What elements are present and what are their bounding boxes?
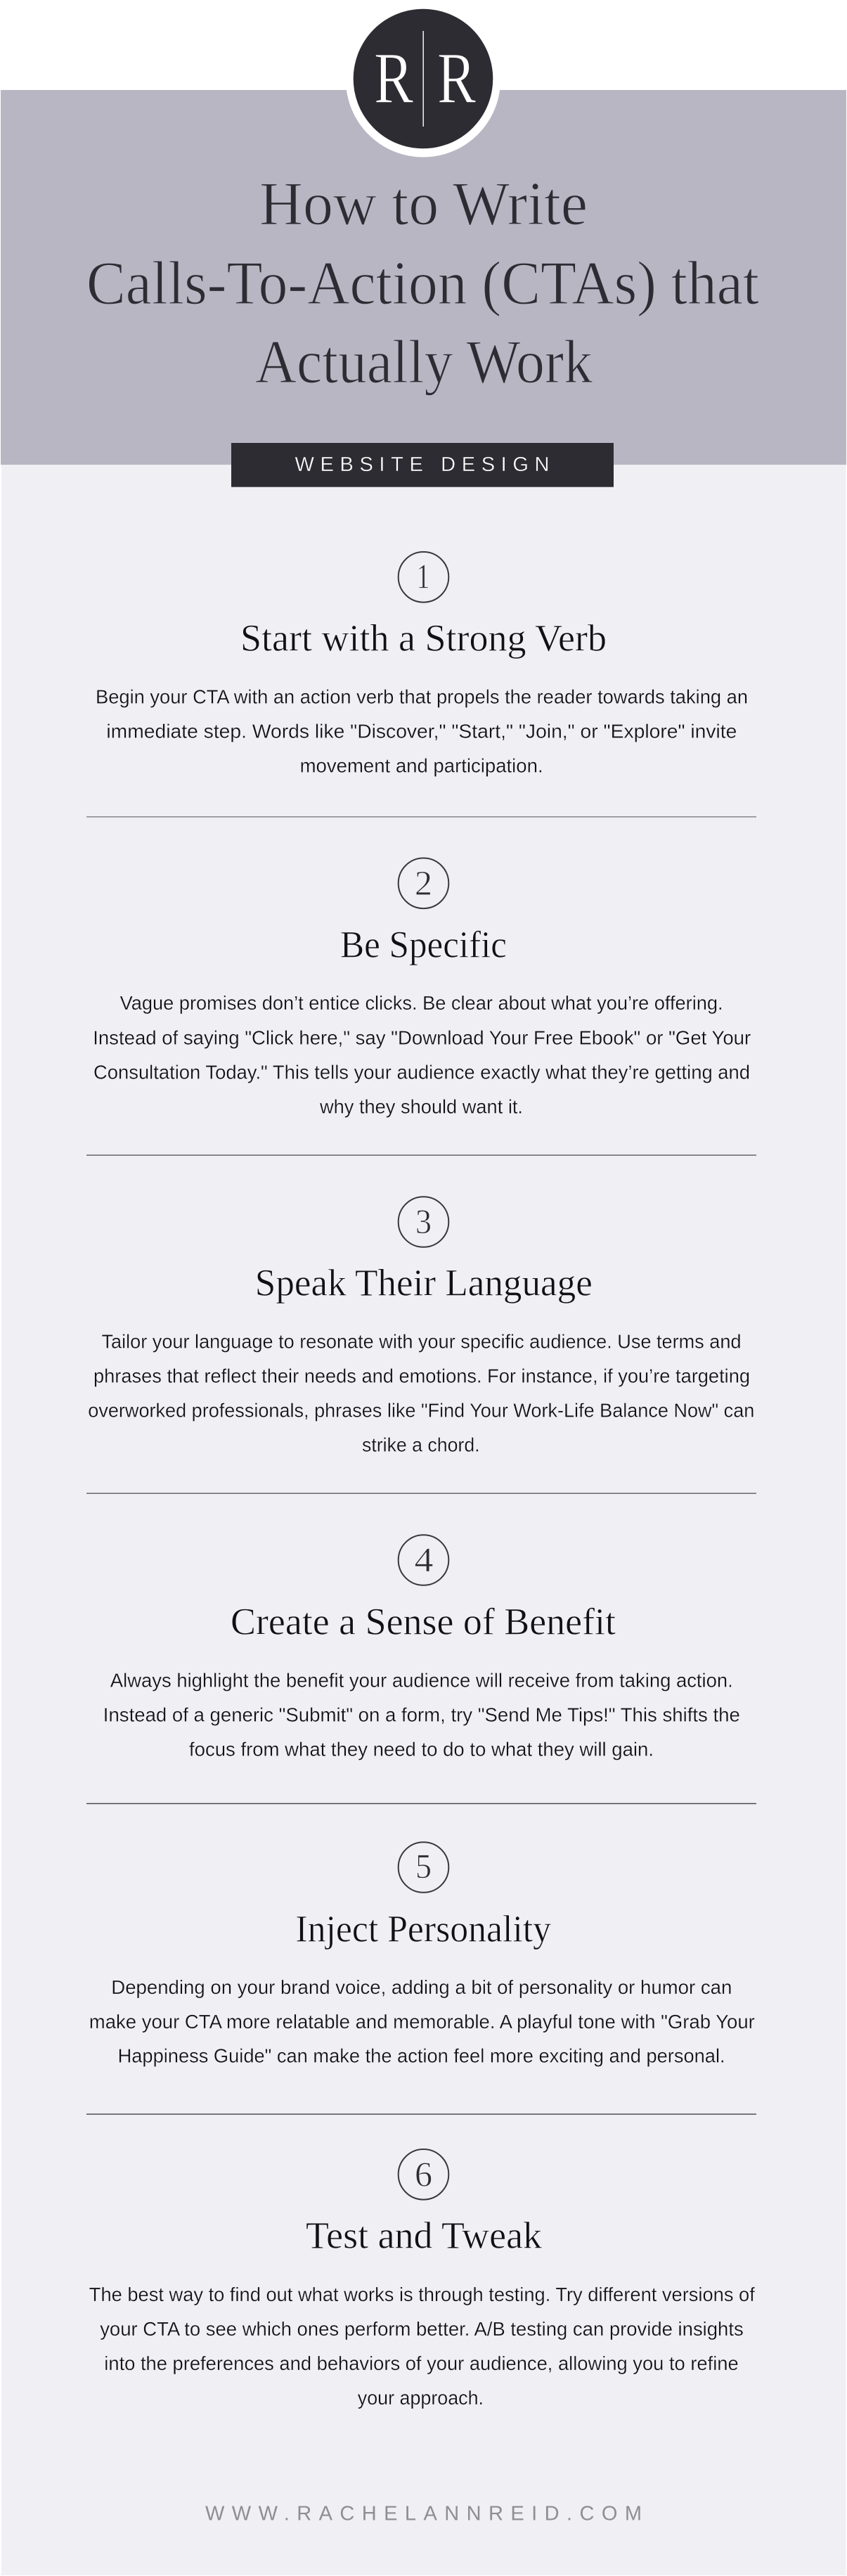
number badge 6	[399, 2149, 448, 2200]
body text 3: strike a chord.	[362, 1434, 480, 1456]
heading 4: Create a Sense of Benefit	[231, 1600, 616, 1642]
body text 1: Begin your CTA with an action verb that propels the reader towards taking an	[96, 686, 748, 708]
body text 3: overworked professionals, phrases like "Find Your Work-Life Balance Now" can	[88, 1399, 754, 1421]
header band	[1, 90, 846, 465]
heading 6: Test and Tweak	[306, 2214, 542, 2256]
body text 4: focus from what they need to do to what they will gain.	[189, 1739, 654, 1760]
body text 6: your approach.	[358, 2387, 484, 2409]
body text 5: Happiness Guide" can make the action feel more exciting and personal.	[118, 2045, 725, 2067]
heading 3: Speak Their Language	[255, 1262, 593, 1304]
body text 5: make your CTA more relatable and memorable. A playful tone with "Grab Your	[89, 2011, 755, 2033]
panel: step 1	[96, 552, 748, 776]
logo: R|R monogram: R	[437, 38, 476, 119]
category label bar	[231, 443, 614, 487]
number badge 6: 6	[415, 2154, 432, 2194]
body text 4	[103, 1670, 740, 1760]
body text 5	[89, 1976, 755, 2067]
heading 2: Be Specific	[340, 923, 507, 965]
number badge 2	[399, 858, 448, 908]
body text 3: phrases that reflect their needs and emotions. For instance, if you’re targeting	[93, 1365, 750, 1387]
body text 2: why they should want it.	[319, 1095, 523, 1117]
body text 2	[93, 992, 751, 1117]
body text 5: Depending on your brand voice, adding a bit of personality or humor can	[111, 1976, 732, 1998]
heading 1: Start with a Strong Verb	[240, 617, 607, 659]
panel: step 3	[88, 1197, 754, 1456]
number badge 2: 2	[415, 863, 432, 902]
heading 5: Inject Personality	[295, 1908, 551, 1950]
body text 6: The best way to find out what works is through testing. Try different versions of	[89, 2284, 755, 2305]
panel: step 2	[93, 858, 751, 1117]
number badge 4: 4	[415, 1540, 433, 1579]
body text 6: into the preferences and behaviors of your audience, allowing you to refine	[104, 2352, 739, 2374]
body text 4: Always highlight the benefit your audience will receive from taking action.	[110, 1670, 733, 1692]
category label bar: WEBSITE DESIGN	[295, 453, 550, 476]
number badge 1: 1	[416, 557, 430, 596]
number badge 4	[399, 1535, 448, 1585]
number badge 1	[399, 552, 448, 603]
logo: R|R monogram: R	[374, 38, 414, 119]
body text 6: your CTA to see which ones perform better. A/B testing can provide insights	[100, 2318, 744, 2340]
body text 1: movement and participation.	[300, 754, 543, 776]
body text 1	[96, 686, 748, 776]
body text 1: immediate step. Words like "Discover," "Start," "Join," or "Explore" invite	[106, 720, 737, 742]
panel: step 5	[89, 1842, 755, 2067]
body text 6	[89, 2284, 755, 2409]
title: Actually Work	[255, 328, 593, 397]
panel: step 4	[103, 1535, 740, 1760]
title: Calls-To-Action (CTAs) that	[86, 250, 759, 318]
body text 4: Instead of a generic "Submit" on a form, try "Send Me Tips!" This shifts the	[103, 1704, 740, 1726]
body text 2: Vague promises don’t entice clicks. Be clear about what you’re offering.	[120, 992, 723, 1014]
title	[86, 170, 759, 397]
title: How to Write	[259, 170, 588, 238]
logo: R|R monogram	[346, 3, 500, 157]
body text 3	[88, 1330, 754, 1456]
body text 3: Tailor your language to resonate with your specific audience. Use terms and	[101, 1330, 741, 1352]
number badge 3	[399, 1197, 448, 1247]
number badge 3: 3	[415, 1202, 432, 1241]
panel: step 6	[89, 2149, 755, 2409]
body text 2: Consultation Today." This tells your audience exactly what they’re getting and	[93, 1061, 750, 1083]
number badge 5	[399, 1842, 448, 1893]
body text 2: Instead of saying "Click here," say "Download Your Free Ebook" or "Get Your	[93, 1026, 751, 1048]
number badge 5: 5	[415, 1846, 432, 1886]
footer website URL: WWW.RACHELANNREID.COM	[205, 2503, 642, 2525]
